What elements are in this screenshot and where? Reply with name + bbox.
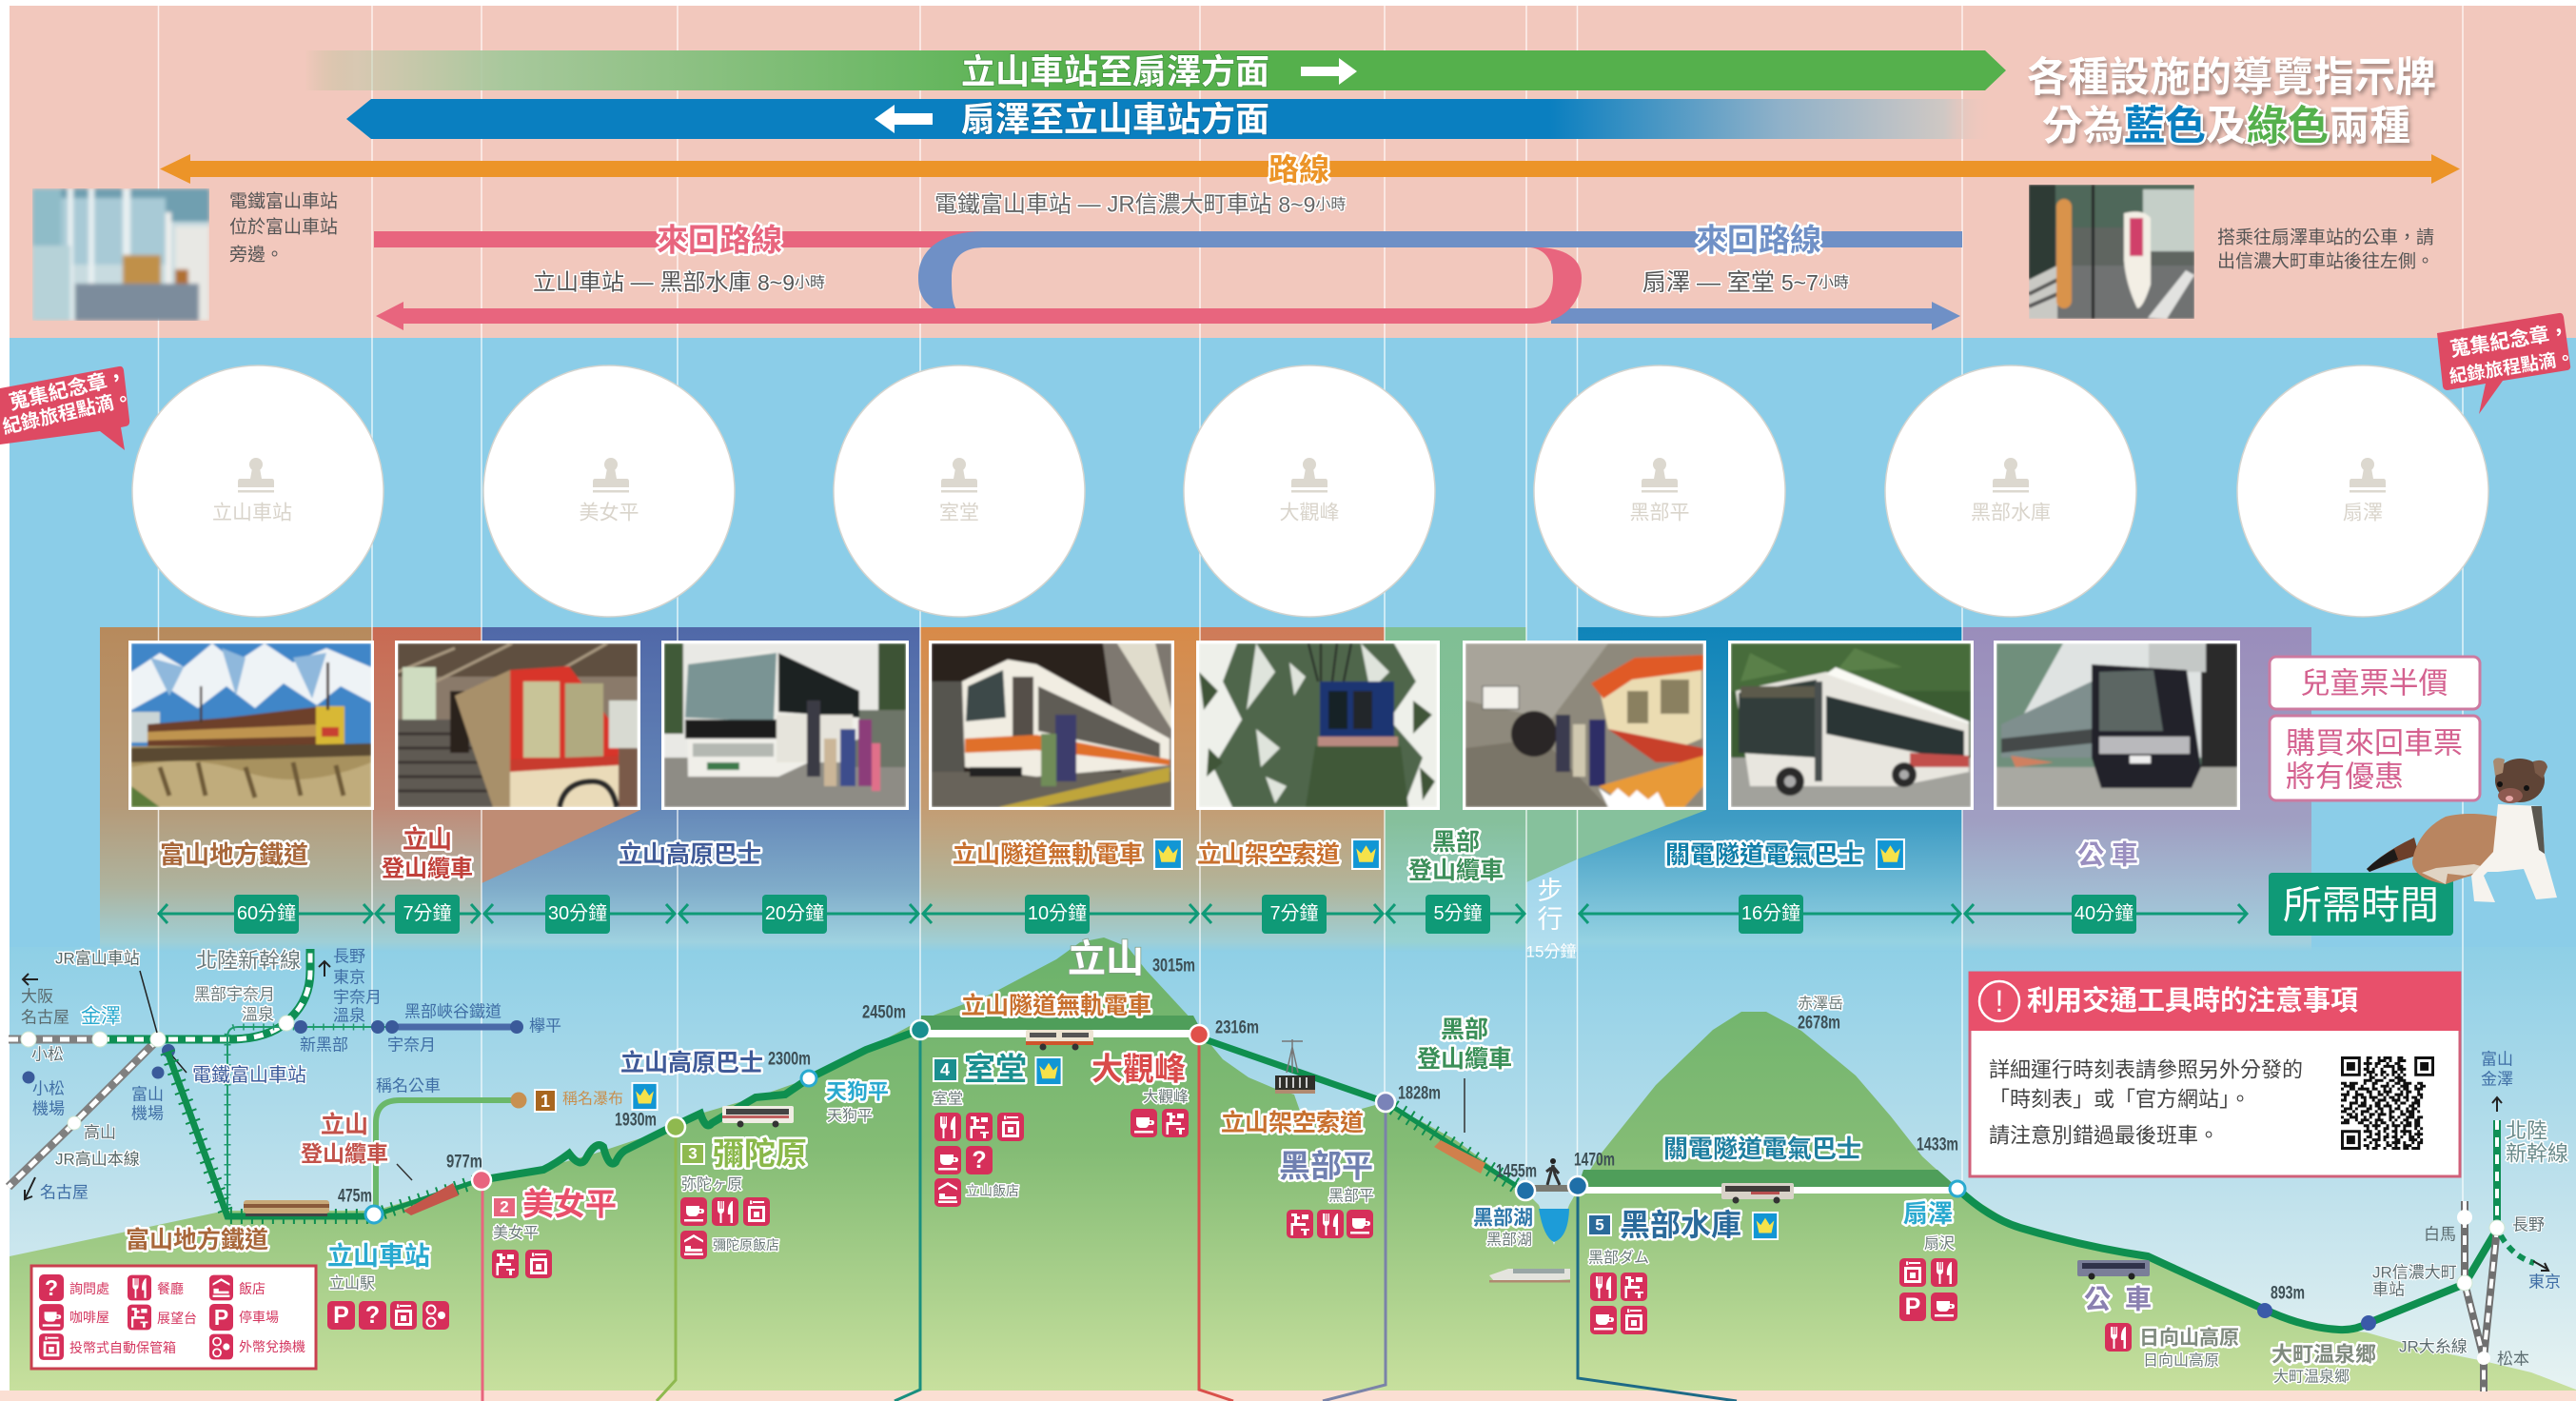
panel: facility legend: 咖啡屋 (69, 1310, 109, 1325)
label: 975m elevation: 977m (446, 1152, 482, 1173)
icon: walking person (1546, 1158, 1560, 1185)
panel: transport notice (1969, 972, 2461, 1176)
panel: round trip discount note: 購買來回車票 (2286, 727, 2463, 760)
map labels: west: 小松 (31, 1045, 64, 1064)
stamp circle: Bijodaira: 美女平 (579, 503, 639, 523)
map labels: west: 機場 (32, 1100, 65, 1117)
callout: stamp rally left: 紀錄旅程點滴。 (0, 386, 135, 439)
vehicle: trolley bus (1026, 1030, 1093, 1051)
vehicle: local train (244, 1200, 329, 1216)
leader lines (397, 1078, 1465, 1180)
text: Tateyama to Kurobe dam time: 立山車站 — 黑部水庫 8~9小時 (533, 270, 825, 295)
map labels: west: 溫泉 (242, 1005, 274, 1024)
label: Bus on map: 公 (2084, 1285, 2111, 1313)
label: Bus on map: 車 (2125, 1285, 2152, 1313)
label: Daikanbo: 大觀峰 (1143, 1089, 1189, 1106)
heading: sign colours: 分為藍色及綠色兩種 (2042, 104, 2410, 149)
station: Kurobeko (1516, 1181, 1535, 1200)
label: Bus on map (2084, 1285, 2152, 1313)
label: 1828m: 1828m (1398, 1083, 1441, 1104)
label: Kurobe Cable Car (1408, 829, 1504, 884)
photo: Bus to Ogizawa (1994, 641, 2240, 810)
label: Kurobe dam (1588, 1208, 1778, 1266)
label: round trip left: 來回路線 (657, 223, 782, 257)
label: 1455m: 1455m (1496, 1161, 1537, 1182)
label: Murodo: 4 (940, 1060, 950, 1079)
label: 1433m: 1433m (1917, 1135, 1958, 1155)
text: Dentetsu station note: 電鐵富山車站 (229, 190, 338, 211)
station: Midagahara (666, 1117, 685, 1136)
label: Kanden Tunnel Bus: 關電隧道電氣巴士 (1665, 840, 1863, 869)
panel: transport colour bands (100, 627, 2311, 952)
vehicle: Kurobe cable car (1434, 1140, 1485, 1174)
map labels: west: JR富山車站 (55, 950, 140, 967)
drop line: Murodo (895, 1030, 920, 1401)
label: Trolley bus on map: 立山隧道無軌電車 (961, 992, 1151, 1019)
map labels: east: 松本 (2497, 1350, 2529, 1369)
panel: travel time header: 所需時間 (2283, 883, 2439, 927)
text: Omachi bus stop note: 搭乘往扇澤車站的公車，請 (2217, 227, 2434, 247)
tunnel: Tateyama (920, 1016, 1201, 1037)
map: western rail network (9, 949, 523, 1215)
panel: facility legend: 飯店 (239, 1281, 265, 1296)
label: Trolley Bus: 立山隧道無軌電車 (953, 840, 1143, 868)
map labels: east: 金澤 (2481, 1070, 2513, 1089)
map labels: west: 東京 (333, 969, 365, 986)
pill: 60 min: 60分鐘 (237, 902, 296, 924)
panel: child fare note (2270, 657, 2480, 709)
label: Daikanbo: 大觀峰 (1091, 1051, 1186, 1087)
label: Tateyama station (327, 1242, 430, 1292)
label: Midagahara (681, 1136, 807, 1194)
map labels: west: 欅平 (529, 1016, 561, 1036)
panel: facility legend: 停車場 (239, 1310, 279, 1325)
label: Bijodaira: 2 (500, 1197, 509, 1216)
station: Kurobedaira (1376, 1093, 1395, 1112)
track: Kurobe cable car (1386, 1102, 1525, 1192)
vehicle: ropeway gondola (1275, 1039, 1315, 1094)
label: Kurobedaira: 黑部平 (1328, 1188, 1374, 1205)
pill: 20 min (762, 895, 827, 934)
track: Alpen route bus road (1957, 1189, 2498, 1330)
label: Daikanbo (1091, 1051, 1189, 1106)
map labels: west: 黑部宇奈月 (194, 986, 275, 1003)
label: Ropeway: 立山架空索道 (1197, 841, 1340, 868)
arrow: blue direction band (346, 99, 1994, 139)
map labels: west (21, 948, 561, 1201)
station: Omachi onsen (2361, 1315, 2376, 1331)
heading: Ogizawa to Tateyama: 扇澤至立山車站方面 (961, 99, 1269, 139)
text: notice body: 詳細運行時刻表請參照另外分發的 (1989, 1058, 2303, 1081)
label: Tateyama Cable Car (382, 825, 473, 881)
map labels: west: 名古屋 (40, 1184, 88, 1201)
map labels: west: 大阪 (21, 988, 53, 1005)
lower sky (10, 947, 2576, 1394)
pill: 7 min ropeway: 7分鐘 (1269, 902, 1319, 924)
label: Mt Akazawa: 2678m (1798, 1013, 1840, 1034)
panel: facility legend: 外幣兌換機 (239, 1339, 305, 1354)
map labels: west: 機場 (131, 1104, 164, 1123)
station: Tengudaira (801, 1071, 816, 1086)
icon: exclamation (1979, 981, 2019, 1021)
panel: facility legend: P (214, 1305, 228, 1330)
track: Toyama Chiho Railway (167, 1052, 374, 1216)
text: notice body (1989, 1058, 2303, 1148)
label: Shomyo falls: 1 (541, 1092, 550, 1111)
panel: facility legend: 投幣式自動保管箱 (69, 1340, 176, 1355)
photo: Tateyama Ropeway (1196, 641, 1440, 810)
map labels: east: 東京 (2528, 1273, 2561, 1291)
road: Shomyo falls bus (376, 1100, 519, 1209)
map labels: west: 電鐵富山車站 (192, 1064, 306, 1086)
label: Mt Tateyama (1068, 938, 1195, 980)
map labels: west: 名古屋 (21, 1009, 69, 1026)
pill: 10 min (1025, 895, 1090, 934)
stamp circle: Kurobedaira: 黑部平 (1629, 503, 1690, 523)
photo: Dentetsu Toyama station (32, 188, 209, 321)
label: Highland bus on map: 立山高原巴士 (620, 1050, 763, 1076)
panel: facility legend (31, 1266, 316, 1369)
label: Tateyama Highland Bus: 立山高原巴士 (619, 841, 761, 868)
illustration: stoat (2367, 758, 2557, 902)
arrow: round trip loop routes (374, 231, 1962, 330)
label: Hinatayama: 日向山高原 (2139, 1327, 2239, 1350)
map labels: west: 小松 (32, 1079, 65, 1098)
vertical guide lines (158, 6, 2463, 1209)
stamp circle: Ogizawa: 扇澤 (2343, 503, 2383, 523)
label: Kurobe lake: 黑部湖 (1473, 1207, 1533, 1230)
label: Kurobe lake (1473, 1207, 1533, 1249)
label: Murodo (933, 1051, 1062, 1108)
label: 1470m: 1470m (1574, 1150, 1615, 1171)
text: notice body: 「時刻表」或「官方網站」。 (1989, 1087, 2251, 1112)
vehicle: highland bus (722, 1106, 794, 1127)
drop line: Daikanbo (1199, 1035, 1233, 1401)
mountain profile ground (10, 937, 2576, 1391)
station: Ogizawa (1950, 1181, 1965, 1196)
pill: 5 min: 5分鐘 (1433, 902, 1483, 924)
map labels: east: JR信濃大町 (2372, 1264, 2457, 1281)
label: Ogizawa: 扇沢 (1924, 1235, 1955, 1253)
drop line: Midagahara (657, 1127, 676, 1401)
station: Murodo (911, 1020, 930, 1039)
stamp circle: Kurobedaira (1534, 365, 1785, 617)
panel: travel time header (2269, 873, 2453, 936)
label: walk: 行 (1538, 905, 1563, 934)
stamp circle: Tateyama (132, 365, 383, 617)
label: Bijodaira: 美女平 (522, 1186, 617, 1222)
station: Hinatayama (2257, 1303, 2272, 1318)
stamp circle: Kurobe dam (1885, 365, 2136, 617)
stamp circle: Murodo: 室堂 (939, 503, 979, 523)
map: eastern rail network (2457, 1097, 2548, 1391)
icons: Ogizawa facilities (1899, 1258, 1957, 1321)
label: Bus: 公 車 (2077, 839, 2138, 870)
stamp circle: Murodo (834, 365, 1085, 617)
pill: 16 min (1739, 895, 1803, 934)
label: Kurobe lake: 黑部湖 (1486, 1232, 1532, 1249)
label: Ogizawa: 扇澤 (1903, 1199, 1953, 1228)
tunnel: Kanden (1578, 1170, 1957, 1194)
text: Omachi bus stop note: 出信濃大町車站後往左側。 (2217, 251, 2434, 272)
label: Kurobe dam: 5 (1595, 1216, 1604, 1233)
map labels: east (2372, 1051, 2568, 1369)
panel: facility legend: 展望台 (157, 1311, 197, 1326)
map labels: west: JR高山本線 (55, 1150, 140, 1169)
label: Mt Tateyama: 3015m (1152, 956, 1195, 977)
map labels: west: 北陸新幹線 (196, 948, 301, 973)
label: Ogizawa (1903, 1199, 1955, 1253)
icons: Murodo facilities (934, 1113, 1024, 1207)
photo: Omachi bus stop (2029, 185, 2194, 319)
pill: 40 min: 40分鐘 (2075, 902, 2134, 924)
map labels: west: 溫泉 (333, 1007, 365, 1024)
label: Toyama Chiho Railway: 富山地方鐵道 (160, 840, 308, 869)
icons: Murodo facilities: ? (972, 1147, 987, 1174)
label: Tateyama station: 立山駅 (329, 1275, 375, 1292)
label: Omachi onsen (2271, 1342, 2376, 1386)
vehicle: cable car (403, 1183, 459, 1215)
panel: facility legend: 餐廳 (157, 1281, 184, 1296)
map labels: west: 黑部峽谷鐵道 (404, 1003, 501, 1020)
top pink route panel background (10, 6, 2576, 338)
callout: stamp rally right: 紀錄旅程點滴。 (2448, 346, 2576, 387)
icons: Kurobedaira facilities (1287, 1210, 1373, 1238)
icons: Midagahara facilities: 彌陀原飯店 (713, 1237, 779, 1253)
map labels: east: 白馬 (2424, 1226, 2456, 1243)
map labels: east: 長野 (2512, 1216, 2545, 1233)
label: Tateyama station: 立山車站 (327, 1242, 430, 1271)
callout: stamp rally left (0, 365, 135, 450)
label: Ropeway on map: 立山架空索道 (1221, 1110, 1364, 1136)
vehicle: sightseeing boat (1489, 1269, 1570, 1283)
icons: Bijodaira facilities (492, 1250, 552, 1278)
pill: 16 min: 16分鐘 (1741, 902, 1800, 924)
label: Kurobe Cable Car: 黑部 (1432, 829, 1480, 856)
icon: exclamation: ! (1996, 984, 2003, 1018)
label: Mt Akazawa (1798, 996, 1843, 1034)
label: 2316m: 2316m (1215, 1018, 1259, 1037)
map labels: east: 新幹線 (2506, 1142, 2568, 1165)
label: Kurobedaira (1279, 1148, 1374, 1205)
label: 2300m: 2300m (768, 1049, 811, 1070)
label: Murodo: 室堂 (933, 1091, 963, 1108)
water: Kurobe lake (1539, 1209, 1569, 1242)
label: Tateyama cable car on map (301, 1112, 388, 1166)
label: Kanden tunnel bus on map: 關電隧道電氣巴士 (1663, 1135, 1861, 1163)
label: 893m: 893m (2271, 1283, 2305, 1304)
map labels: west: 金澤 (81, 1005, 121, 1028)
panel: facility legend: ? (45, 1275, 58, 1300)
label: Kurobe dam: 黑部水庫 (1620, 1208, 1741, 1242)
photo: Tateyama cable car (395, 641, 640, 810)
label: Bijodaira (493, 1186, 617, 1241)
station: Shomyo falls (510, 1093, 527, 1108)
icons: Midagahara facilities (680, 1197, 779, 1259)
panel: facility legend: 詢問處 (69, 1281, 109, 1296)
icons: Tateyama station facilities (327, 1301, 449, 1330)
icons: Tateyama station facilities: ? (365, 1302, 380, 1329)
label: walk: 步 (1538, 877, 1563, 905)
drop line: Kurobedaira (1323, 1102, 1386, 1401)
callout: stamp rally left: 蒐集紀念章， (7, 365, 128, 414)
map labels: west: 宇奈月 (387, 1036, 436, 1055)
station: Bijodaira (472, 1171, 491, 1190)
text: notice body: 請注意別錯過最後班車。 (1989, 1123, 2219, 1148)
drop line: Kurobe dam (1578, 1186, 1737, 1401)
text: Ogizawa to Murodo time: 扇澤 — 室堂 5~7小時 (1642, 269, 1849, 296)
track: ropeway (1199, 1037, 1386, 1102)
pill: 60 min (234, 895, 299, 934)
pill: 7 min: 7分鐘 (403, 902, 452, 924)
stamp circle: Kurobe dam: 黑部水庫 (1971, 503, 2051, 523)
icons: Kurobe dam facilities (1590, 1273, 1647, 1334)
map labels: east: JR大糸線 (2399, 1338, 2468, 1355)
pill: 7 min ropeway (1262, 895, 1327, 934)
label: Omachi onsen: 大町温泉郷 (2271, 1342, 2376, 1367)
background sky (10, 338, 2576, 957)
label: Kurobe dam: 黑部ダム (1588, 1249, 1649, 1266)
label: Tengudaira: 天狗平 (827, 1108, 873, 1125)
pill: 20 min: 20分鐘 (765, 902, 824, 924)
label: Midagahara: 彌陀原 (713, 1136, 807, 1171)
pill: 40 min (2072, 895, 2136, 934)
vehicle: line bus (2077, 1260, 2150, 1279)
chart: travel time row (159, 895, 2247, 934)
map labels: west: 宇奈月 (333, 988, 382, 1007)
label: Hinatayama (2139, 1327, 2239, 1369)
label: Kurobe cable car on map (1417, 1016, 1512, 1073)
callout: stamp rally right: 蒐集紀念章， (2448, 320, 2570, 361)
label: Midagahara: 3 (688, 1144, 698, 1163)
photo: Kanden Tunnel Electric Bus (1728, 641, 1974, 810)
label: Tateyama cable car on map: 登山纜車 (301, 1141, 388, 1166)
vehicle: electric bus (1721, 1183, 1794, 1203)
heading: notice title: 利用交通工具時的注意事項 (2027, 985, 2358, 1016)
photo: Kurobe Cable Car (1463, 641, 1706, 810)
label: Shomyo falls (535, 1083, 658, 1131)
label: route: 路線 (1268, 152, 1329, 187)
text: Dentetsu station note: 位於富山車站 (229, 217, 338, 238)
stamp circle: Tateyama: 立山車站 (212, 503, 292, 523)
pill: 10 min: 10分鐘 (1028, 902, 1087, 924)
label: Shomyo falls: 稱名瀑布 (562, 1089, 623, 1108)
label: Kurobedaira: 黑部平 (1279, 1148, 1373, 1184)
stamp circle: Daikanbo (1184, 365, 1435, 617)
panel: round trip discount note: 將有優惠 (2286, 760, 2404, 794)
heading: Tateyama to Ogizawa: 立山車站至扇澤方面 (961, 51, 1269, 91)
map labels: west: 富山 (131, 1085, 164, 1104)
map labels: east: 富山 (2481, 1051, 2513, 1068)
label: 2450m: 2450m (862, 1003, 906, 1022)
drop line: Bijodaira (482, 1180, 483, 1401)
map labels: east: 北陸 (2506, 1119, 2547, 1142)
label: Midagahara: 弥陀ヶ原 (681, 1176, 742, 1194)
panel: child fare note: 兒童票半價 (2301, 666, 2448, 700)
label: Murodo: 室堂 (964, 1051, 1027, 1087)
text: Dentetsu station note (229, 190, 338, 265)
label: Kurobe cable car on map: 登山纜車 (1417, 1046, 1512, 1073)
station: Kurobe dam (1568, 1176, 1587, 1195)
heading: sign colours: 各種設施的導覽指示牌 (2027, 55, 2436, 101)
map labels: west: 稱名公車 (376, 1077, 441, 1095)
icon: right arrow (1301, 58, 1357, 85)
icon: Hinatayama restaurant (2105, 1323, 2132, 1352)
pill: 7 min (395, 895, 460, 934)
stamp circle: Bijodaira (483, 365, 735, 617)
label: Kurobe Cable Car: 登山纜車 (1408, 858, 1504, 884)
label: Toyama Chiho Railway on map: 富山地方鐵道 (126, 1226, 268, 1253)
label: Tateyama Cable Car: 立山 (403, 825, 452, 854)
icons: Ogizawa facilities: P (1905, 1293, 1920, 1320)
pill: 30 min: 30分鐘 (548, 902, 607, 924)
stations on route (365, 1020, 2376, 1331)
text: whole route time: 電鐵富山車站 — JR信濃大町車站 8~9小時 (934, 192, 1346, 217)
stamp circle: Daikanbo: 大觀峰 (1279, 503, 1340, 523)
arrow: orange route (160, 152, 2460, 187)
map labels: east: 車站 (2372, 1281, 2405, 1298)
label: 15 minutes walk: 15分鐘 (1526, 942, 1576, 961)
label: Shomyo falls: 1930m (615, 1110, 657, 1131)
icons: Daikanbo facilities (1131, 1109, 1189, 1137)
heading: sign colours (2027, 55, 2436, 149)
label: Mt Tateyama: 立山 (1068, 938, 1144, 980)
callout: stamp rally right (2437, 313, 2576, 414)
track: Highland bus road (480, 1030, 920, 1180)
footer strip (0, 1391, 2576, 1401)
text: Dentetsu station note: 旁邊。 (229, 244, 284, 265)
photo: Toyama Chiho Railway (128, 641, 374, 810)
track: Tateyama cable car (374, 1180, 480, 1215)
label: round trip right: 來回路線 (1696, 223, 1821, 257)
label: Tateyama Cable Car: 登山纜車 (382, 857, 473, 881)
map labels: west: 長野 (333, 948, 365, 965)
label: Tateyama cable car on map: 立山 (321, 1112, 368, 1138)
label: walk (1538, 877, 1563, 934)
icons: Tateyama station facilities: P (333, 1302, 349, 1329)
label: Tengudaira (826, 1079, 889, 1125)
station: Tateyama (365, 1206, 383, 1223)
QR code (2341, 1056, 2434, 1150)
map labels: west: 高山 (84, 1123, 116, 1142)
panel: round trip discount note (2270, 716, 2480, 800)
label: 475m elevation: 475m (338, 1186, 372, 1207)
label: Hinatayama: 日向山高原 (2143, 1352, 2219, 1369)
station: Daikanbo (1190, 1025, 1209, 1044)
text: Omachi bus stop note (2217, 227, 2434, 272)
label: Omachi onsen: 大町温泉郷 (2273, 1369, 2350, 1386)
photo: Tateyama Highland Bus (661, 641, 909, 810)
label: Kurobe cable car on map: 黑部 (1441, 1016, 1488, 1043)
label: Tengudaira: 天狗平 (826, 1079, 889, 1104)
arrow: green direction band (305, 50, 2006, 91)
icons: Murodo facilities: 立山飯店 (966, 1183, 1019, 1198)
label: Bijodaira: 美女平 (493, 1224, 539, 1241)
pill: 30 min (545, 895, 610, 934)
pill: 5 min (1426, 895, 1490, 934)
stamp circle: Ogizawa (2237, 365, 2488, 617)
map labels: west: 新黑部 (300, 1036, 348, 1055)
icon: left arrow (875, 105, 933, 133)
photo: Tateyama Tunnel Trolley Bus (929, 641, 1174, 810)
label: Mt Akazawa: 赤澤岳 (1798, 996, 1843, 1013)
bridge: walking section (1525, 1185, 1579, 1192)
